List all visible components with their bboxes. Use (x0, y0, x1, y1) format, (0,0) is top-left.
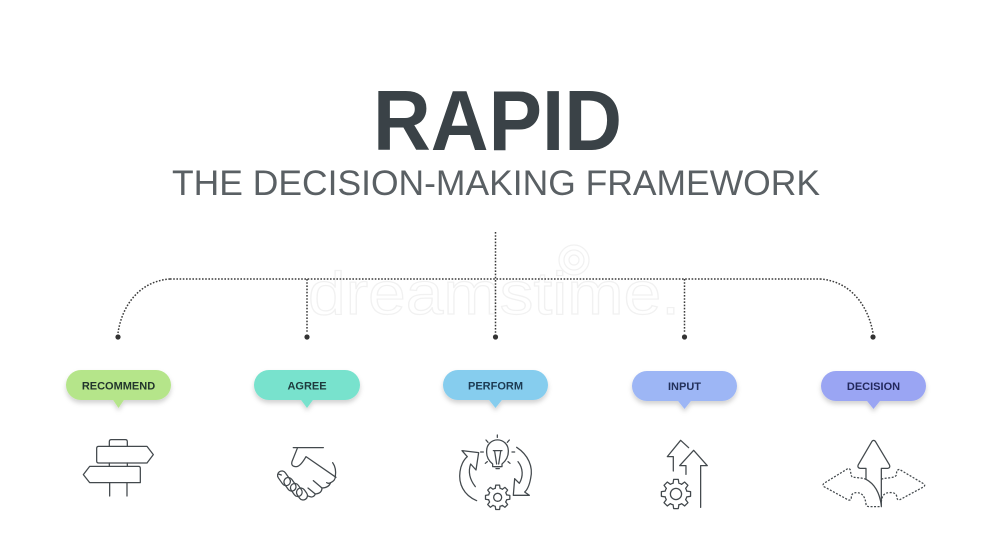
column: input (632, 371, 737, 509)
column: decision (821, 371, 926, 507)
column: perform (443, 370, 548, 509)
column: agree (254, 370, 360, 502)
icon: signpost (83, 440, 153, 496)
watermark: dreamstime. (308, 260, 680, 327)
icon: three-way arrows (823, 440, 925, 507)
label pill: recommend: RECOMMEND (82, 380, 155, 392)
gear (485, 485, 510, 509)
label pill: decision: DECISION (847, 381, 900, 393)
bulb (481, 435, 515, 469)
title: RAPID (373, 74, 622, 169)
label pill: agree: AGREE (287, 380, 327, 392)
icon: gear with up arrows (661, 440, 707, 509)
subtitle: THE DECISION-MAKING FRAMEWORK (172, 164, 820, 203)
cycle arrows (460, 451, 479, 501)
label pill: perform: PERFORM (468, 380, 523, 392)
label pill: input: INPUT (668, 381, 701, 393)
icon: handshake (276, 448, 336, 502)
dotted connector tree (115, 232, 876, 340)
icon: idea cycle (460, 435, 531, 509)
column: recommend (66, 370, 171, 496)
